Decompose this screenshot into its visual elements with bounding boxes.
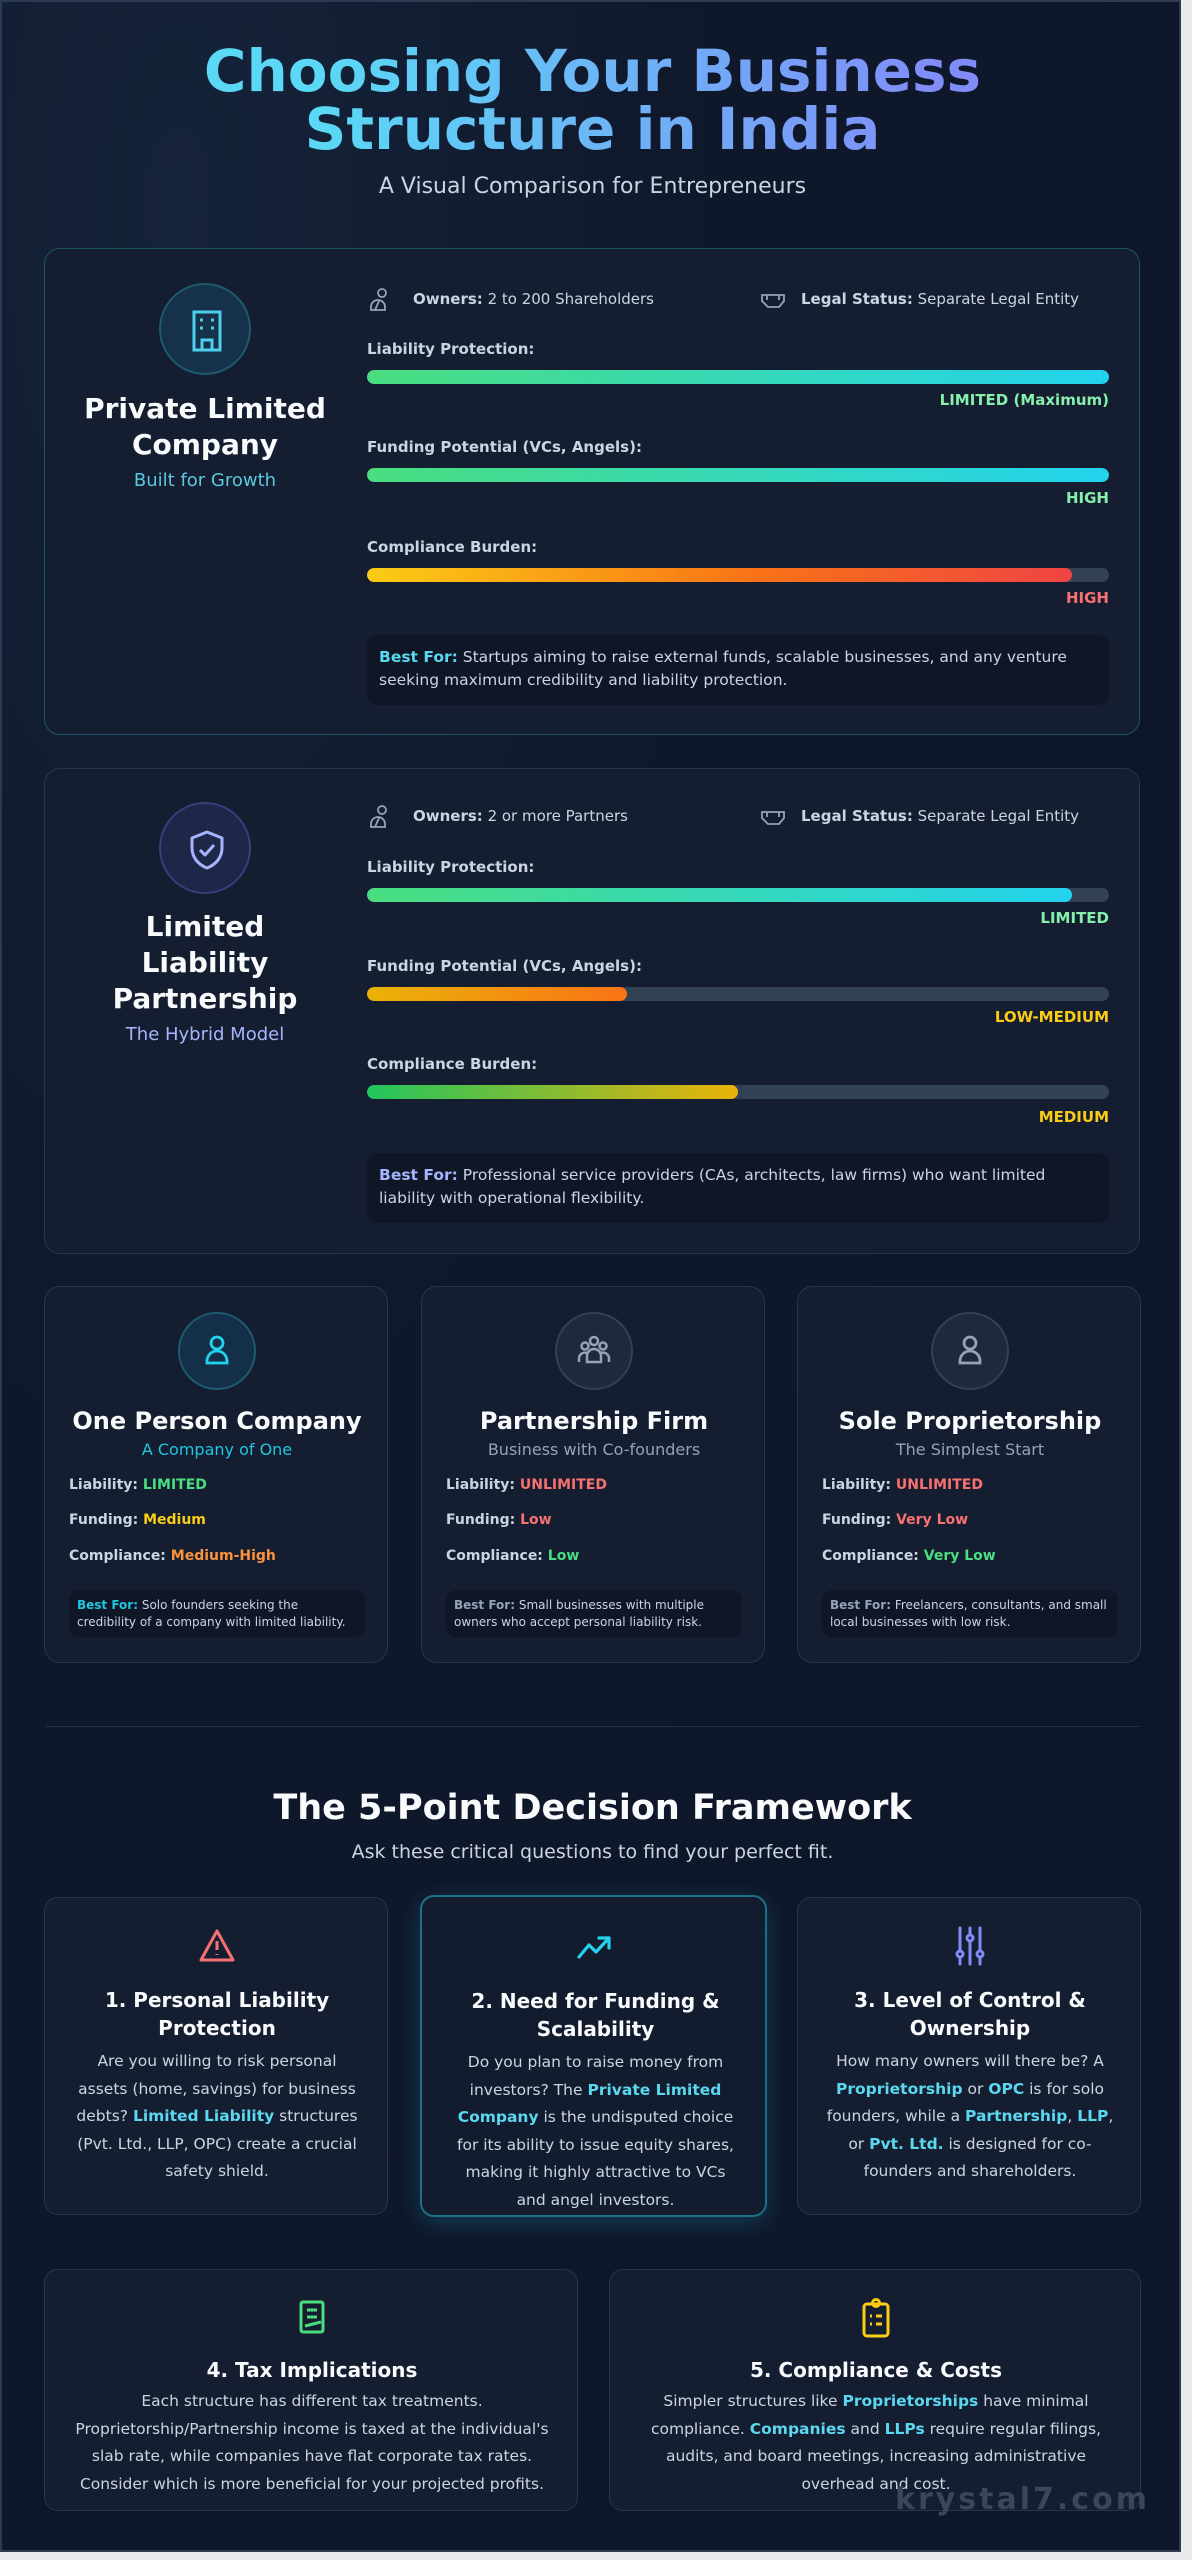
attributes: Liability: UNLIMITED xyxy=(822,1477,983,1493)
panel: tax implications xyxy=(44,2269,578,2511)
panel: limited liability partnership: MEDIUM xyxy=(1039,1108,1109,1126)
legal status info: Legal Status: Separate Legal Entity xyxy=(801,807,1079,825)
owners info: Owners: 2 to 200 Shareholders xyxy=(413,290,654,308)
title: Choosing Your Business xyxy=(204,37,981,105)
best for xyxy=(69,1590,365,1637)
icon: clipboard xyxy=(862,2298,890,2338)
attributes: Funding: Very Low xyxy=(822,1512,968,1528)
panel: partnership firm xyxy=(421,1286,765,1663)
panel: funding & scalability (highlighted) xyxy=(420,1895,767,2217)
attributes: Compliance: Very Low xyxy=(822,1548,996,1564)
tagline: Built for Growth xyxy=(134,470,276,491)
icon: trend up xyxy=(577,1936,611,1959)
panel: one person company xyxy=(44,1286,388,1663)
bar: compliance burden: HIGH xyxy=(1066,589,1109,607)
panel: limited liability partnership xyxy=(44,768,1140,1254)
icon: person xyxy=(178,1312,256,1390)
bar: compliance burden xyxy=(367,538,1109,607)
text: Each structure has different tax treatments. Proprietorship/Partnership income is taxed at the individual's slab rate, while companies have flat corporate tax rates. Consider which is more beneficial for your projected profits. xyxy=(75,2392,549,2492)
icon: shield xyxy=(159,802,251,894)
bar: funding potential xyxy=(367,957,1109,1026)
panel: private limited company xyxy=(44,248,1140,735)
tagline: Business with Co-founders xyxy=(488,1440,700,1459)
heading: Partnership Firm xyxy=(480,1407,708,1435)
attributes: Funding: Low xyxy=(446,1512,552,1528)
heading: private limited company: Private Limited xyxy=(84,392,326,425)
bar: funding potential: Funding Potential (VCs, Angels): xyxy=(367,438,642,456)
bar: liability protection: LIMITED xyxy=(1040,909,1109,927)
owners info xyxy=(370,288,654,311)
bar: compliance burden: Compliance Burden: xyxy=(367,538,537,556)
bar: liability protection: Liability Protection: xyxy=(367,340,534,358)
bar: funding potential: LOW-MEDIUM xyxy=(995,1008,1109,1026)
heading: limited liability partnership xyxy=(113,910,297,1015)
text: How many owners will there be? A Proprietorship or OPC is for solo founders, while a Partnership, LLP, or Pvt. Ltd. is designed for co-founders and shareholders. xyxy=(827,2052,1113,2180)
text: Are you willing to risk personal assets (home, savings) for business debts? Limited Liability structures (Pvt. Ltd., LLP, OPC) create a crucial safety shield. xyxy=(76,2052,358,2180)
tagline: A Company of One xyxy=(142,1440,292,1459)
best for: Best For: Small businesses with multiple owners who accept personal liability risk. xyxy=(454,1598,704,1629)
bar: compliance burden xyxy=(367,1055,1109,1126)
icon: building xyxy=(159,283,251,375)
heading: private limited company xyxy=(84,392,326,461)
bar: funding potential xyxy=(367,438,1109,507)
watermark: krystal7.com xyxy=(895,2482,1150,2517)
bar: liability protection: Liability Protection: xyxy=(367,858,534,876)
best for xyxy=(367,1153,1109,1223)
panel: compliance & costs xyxy=(609,2269,1141,2511)
subtitle: A Visual Comparison for Entrepreneurs xyxy=(379,174,806,199)
icon: warning xyxy=(200,1929,235,1962)
bar: liability protection: LIMITED (Maximum) xyxy=(940,391,1109,409)
icon: receipt xyxy=(300,2300,324,2334)
heading: limited liability partnership: Liability xyxy=(142,946,268,979)
best for: Best For: Solo founders seeking the credibility of a company with limited liability. xyxy=(77,1598,346,1629)
attributes: Liability: UNLIMITED xyxy=(446,1477,607,1493)
icon: person xyxy=(931,1312,1009,1390)
attributes: Compliance: Low xyxy=(446,1548,579,1564)
attributes: Funding: Medium xyxy=(69,1512,206,1528)
text: Do you plan to raise money from investors? The Private Limited Company is the undisputed choice for its ability to issue equity shares, making it highly attractive to VCs and angel investors. xyxy=(457,2053,734,2208)
bar: liability protection xyxy=(367,858,1109,927)
heading: private limited company: Company xyxy=(132,428,278,461)
attributes: Liability: LIMITED xyxy=(69,1477,207,1493)
tagline: The Simplest Start xyxy=(896,1440,1044,1459)
best for: Best For: Startups aiming to raise external funds, scalable businesses, and any venture seeking maximum credibility and liability protection. xyxy=(379,648,1067,689)
heading: One Person Company xyxy=(72,1407,362,1435)
text: 1. Personal Liability Protection xyxy=(105,1988,329,2040)
text: 3. Level of Control & Ownership xyxy=(854,1988,1086,2040)
panel: personal liability xyxy=(44,1897,388,2215)
panel: control & ownership xyxy=(797,1897,1141,2215)
owners info: Owners: 2 or more Partners xyxy=(413,807,628,825)
icon: sliders xyxy=(956,1926,984,1966)
bar: funding potential: HIGH xyxy=(1066,489,1109,507)
subheading: Ask these critical questions to find your perfect fit. xyxy=(352,1841,833,1863)
text: Simpler structures like Proprietorships have minimal compliance. Companies and LLPs require regular filings, audits, and board meetings, increasing administrative overhead and cost. xyxy=(651,2392,1101,2492)
attributes xyxy=(446,1477,607,1564)
best for xyxy=(446,1590,742,1637)
panel: sole proprietorship xyxy=(797,1286,1141,1663)
text xyxy=(76,1988,358,2180)
attributes xyxy=(822,1477,996,1564)
attributes: Compliance: Medium-High xyxy=(69,1548,276,1564)
title xyxy=(204,37,981,163)
owners info xyxy=(370,805,628,828)
bar: compliance burden: Compliance Burden: xyxy=(367,1055,537,1073)
attributes xyxy=(69,1477,276,1564)
best for xyxy=(367,635,1109,705)
bar: funding potential: Funding Potential (VCs, Angels): xyxy=(367,957,642,975)
text xyxy=(827,1988,1113,2180)
heading: decision framework: The 5-Point Decision Framework xyxy=(273,1788,912,1828)
heading: limited liability partnership: Limited xyxy=(146,910,264,943)
best for: Best For: Freelancers, consultants, and small local businesses with low risk. xyxy=(830,1598,1107,1629)
text: 4. Tax Implications xyxy=(207,2358,417,2382)
bar: liability protection xyxy=(367,340,1109,409)
legal status info: Legal Status: Separate Legal Entity xyxy=(801,290,1079,308)
title: Structure in India xyxy=(305,95,880,163)
tagline: The Hybrid Model xyxy=(126,1024,284,1045)
heading: Sole Proprietorship xyxy=(839,1407,1101,1435)
icon: group xyxy=(555,1312,633,1390)
text: 2. Need for Funding & Scalability xyxy=(471,1989,720,2041)
best for xyxy=(822,1590,1118,1637)
heading: limited liability partnership: Partnership xyxy=(113,982,297,1015)
text: 5. Compliance & Costs xyxy=(750,2358,1002,2382)
best for: Best For: Professional service providers (CAs, architects, law firms) who want limited liability with operational flexibility. xyxy=(379,1166,1045,1207)
